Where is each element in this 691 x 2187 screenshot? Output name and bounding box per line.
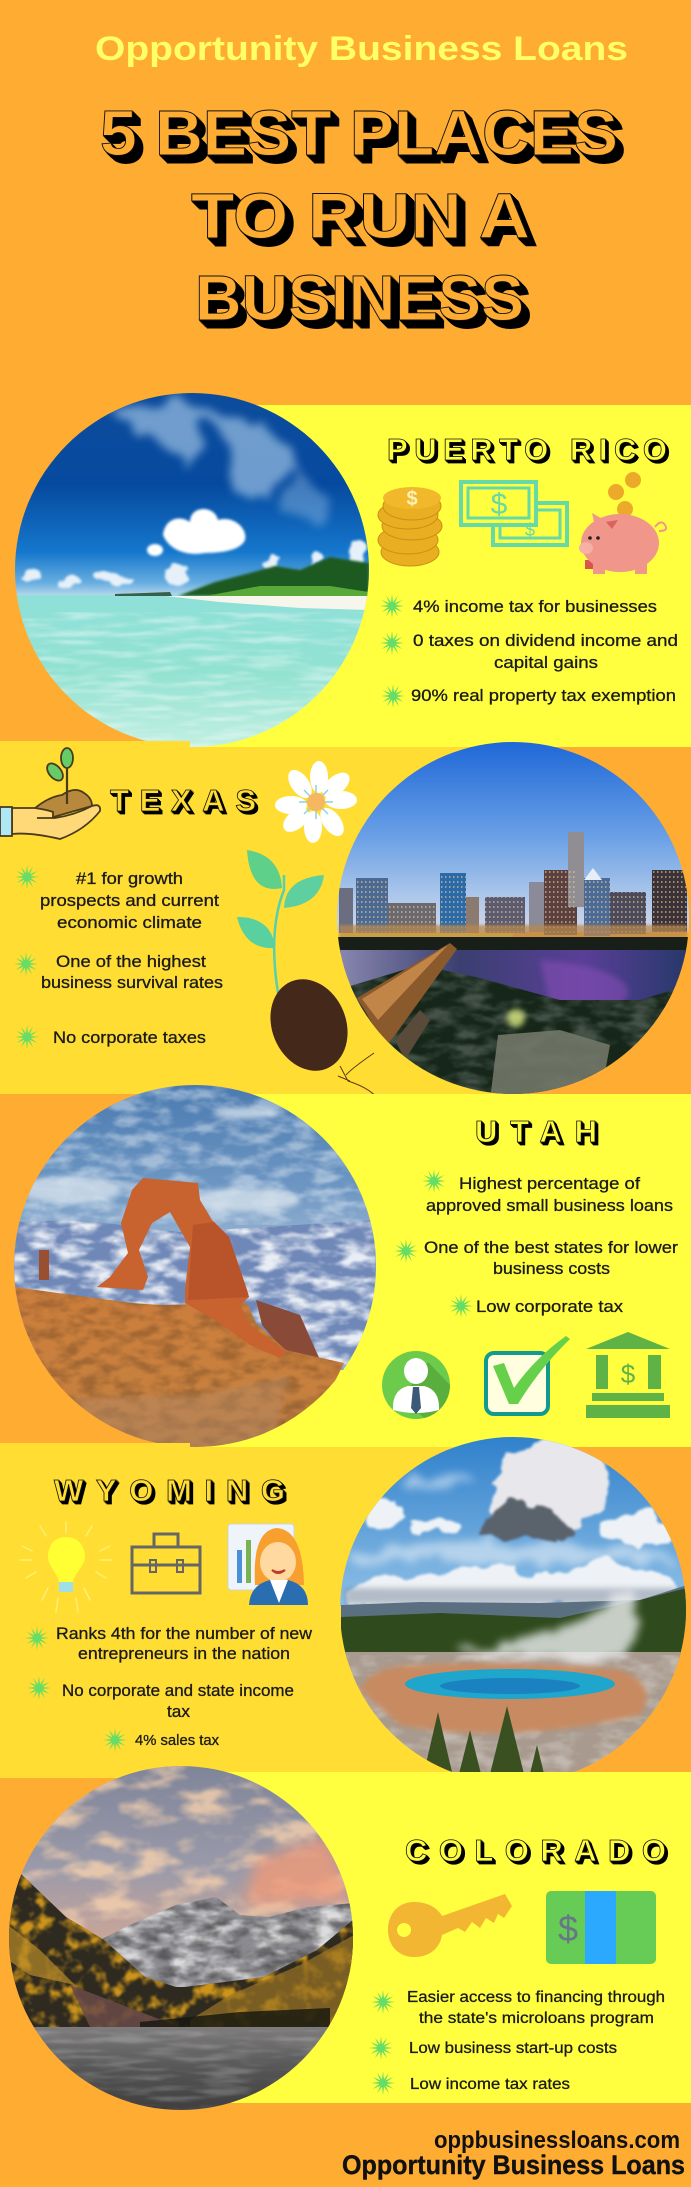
bullet icon (394, 1239, 418, 1263)
panel background (0, 1443, 513, 1778)
panel: Puerto Rico (15, 392, 691, 750)
icon: banknotes: $ (525, 520, 535, 540)
bullet icon (15, 865, 39, 889)
bullet text: 0 taxes on dividend income and (413, 631, 678, 650)
bullet text (40, 869, 219, 932)
icon: coin stack (378, 487, 442, 566)
icon: briefcase (132, 1534, 200, 1593)
title: 5 BEST PLACES (100, 97, 618, 169)
icon: checkbox (486, 1336, 570, 1414)
bullet list (380, 594, 678, 708)
icon: banknotes: $ (491, 488, 508, 521)
bullet text (62, 1681, 294, 1721)
panel background (190, 405, 691, 747)
bullet list (369, 1989, 665, 2095)
bullet icon (15, 1025, 39, 1049)
icon: bank: $ (621, 1359, 636, 1389)
bullet icon (103, 1728, 127, 1752)
panel background (0, 741, 513, 1094)
icon: key (388, 1894, 512, 1957)
panel: Wyoming (0, 1436, 691, 1790)
bullet text: tax (167, 1702, 190, 1721)
photo: Grand Prismatic Spring (339, 1436, 689, 1790)
icon: banknotes (461, 482, 567, 545)
bullet icon (449, 1294, 473, 1318)
heading: Wyoming: WYOMING (54, 1473, 285, 1508)
bullet text: 4% income tax for businesses (413, 597, 657, 616)
bullet icon (371, 1990, 395, 2014)
heading: Puerto Rico: PUERTO RICO (387, 432, 667, 467)
bullet text: approved small business loans (426, 1196, 673, 1215)
bullet icon (14, 952, 38, 976)
icon: businessperson (382, 1351, 450, 1419)
bullet text: business costs (493, 1259, 610, 1278)
title (100, 97, 618, 334)
bullet text: capital gains (494, 653, 598, 672)
bullet text: Low business start-up costs (409, 2040, 617, 2057)
right background (513, 747, 691, 1094)
bullet text: 4% sales tax (135, 1732, 219, 1749)
heading: Colorado: COLORADO (405, 1833, 666, 1868)
icon: money (546, 1891, 656, 1964)
title: TO RUN A (191, 180, 530, 252)
bullet text (424, 1238, 678, 1278)
photo: Maroon Bells (8, 1765, 355, 2112)
footer (342, 2127, 685, 2180)
bullet list (14, 865, 223, 1049)
bullet text: entrepreneurs in the nation (78, 1644, 290, 1663)
bullet text: One of the best states for lower (424, 1238, 678, 1257)
bullet text (407, 1989, 665, 2027)
icon: daisy (275, 761, 357, 843)
panel: Utah (14, 1085, 691, 1452)
bullet icon (371, 2071, 395, 2095)
photo: Delicate Arch (14, 1085, 376, 1452)
bullet text: 90% real property tax exemption (411, 686, 676, 705)
panel: Colorado (8, 1765, 691, 2112)
bullet icon (25, 1626, 49, 1650)
bullet text: No corporate taxes (53, 1028, 206, 1047)
bullet text: Low income tax rates (410, 2076, 570, 2093)
right background (513, 1447, 691, 1772)
bullet text: business survival rates (41, 973, 223, 992)
bullet text: economic climate (57, 913, 202, 932)
bullet text (413, 631, 678, 672)
bullet text: the state's microloans program (419, 2010, 654, 2027)
bullet text: No corporate and state income (62, 1681, 294, 1700)
icon: piggy bank (579, 472, 666, 574)
bullet text (56, 1624, 313, 1663)
icon: bank (586, 1332, 670, 1418)
bullet icon (380, 631, 404, 655)
bullet icon (27, 1676, 51, 1700)
bullet list (25, 1624, 313, 1752)
icon: sprout and seed (237, 850, 381, 1103)
bullet text: Ranks 4th for the number of new (56, 1624, 313, 1643)
icon: presenter (228, 1524, 308, 1605)
bullet text: Highest percentage of (459, 1174, 640, 1193)
photo: tropical beach (15, 392, 369, 750)
bullet text: prospects and current (40, 891, 219, 910)
bullet icon (380, 594, 404, 618)
bullet text: Easier access to financing through (407, 1989, 665, 2006)
icon: hand holding plant (0, 748, 100, 839)
heading: Texas: TEXAS (110, 783, 256, 818)
bullet icon (381, 684, 405, 708)
panel background (180, 1772, 691, 2103)
brand name: Opportunity Business Loans (95, 30, 628, 68)
bullet icon (369, 2036, 393, 2060)
panel background (185, 1094, 691, 1447)
icon: money: $ (558, 1908, 578, 1949)
icon: coin stack: $ (406, 488, 418, 510)
header (95, 30, 628, 334)
bullet list (394, 1169, 678, 1318)
panel: Texas (0, 741, 691, 1103)
bullet icon (422, 1169, 446, 1193)
heading: Utah: UTAH (475, 1114, 597, 1149)
bullet text: One of the highest (56, 952, 206, 971)
title: BUSINESS (195, 262, 524, 334)
bullet text (426, 1174, 673, 1215)
bullet text: Low corporate tax (476, 1297, 624, 1316)
photo: Austin skyline (337, 742, 689, 1100)
bullet text: #1 for growth (76, 869, 183, 888)
icon: lightbulb (20, 1522, 112, 1612)
bullet text (41, 952, 223, 992)
